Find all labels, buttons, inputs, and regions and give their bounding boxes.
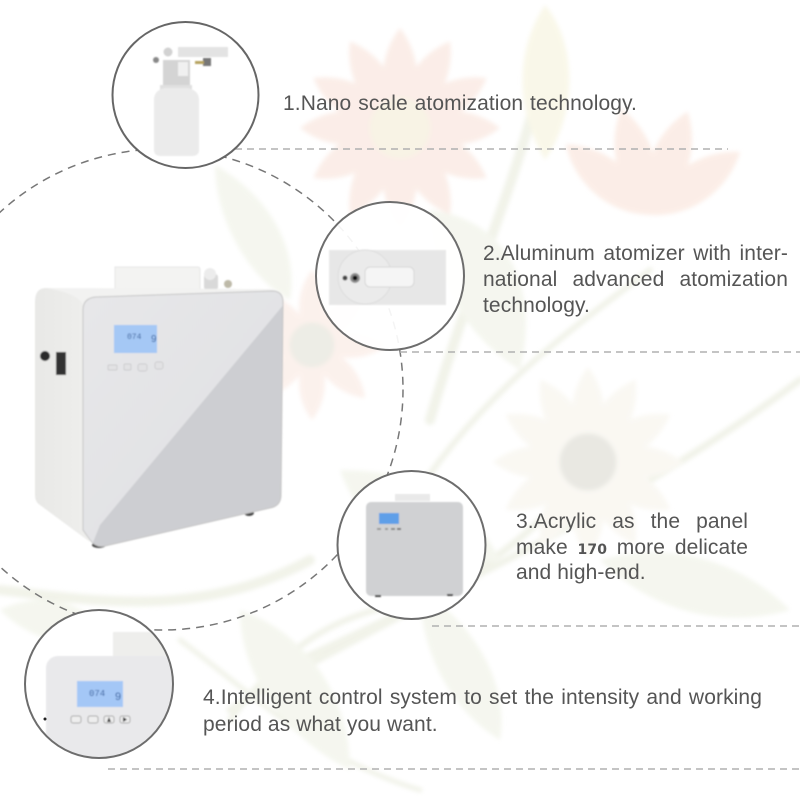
circle 4: control panel close-up	[25, 610, 176, 766]
text: feature 3	[516, 510, 748, 584]
device side panel	[35, 288, 105, 542]
text: feature 3: and high-end.	[516, 561, 646, 584]
text: feature 4	[203, 686, 762, 736]
top pink flower	[300, 28, 500, 228]
small device	[395, 494, 430, 501]
text: feature 3: make 170 more delicate	[516, 536, 748, 559]
device LCD	[114, 325, 157, 353]
main device	[35, 267, 290, 550]
device top block and knob	[115, 267, 232, 292]
device power socket and switch	[40, 351, 50, 361]
large dashed circle	[0, 149, 403, 630]
control panel LCD	[77, 681, 123, 707]
text: feature 2: technology.	[483, 294, 590, 317]
text: feature 2	[483, 242, 788, 317]
circle 4: control panel close-up: 9	[115, 691, 121, 703]
text: feature 4: period as what you want.	[203, 713, 438, 736]
text: feature 1: 1.Nano scale atomization technology.	[283, 92, 637, 115]
text: feature 2: 2.Aluminum atomizer with inter-	[483, 242, 788, 265]
text: feature 2: national advanced atomization	[483, 268, 788, 291]
main device: 9	[151, 334, 157, 345]
circle 3: device front view	[338, 471, 486, 619]
lower right daisy	[493, 367, 683, 557]
bottle	[153, 47, 228, 156]
centre flower	[237, 270, 387, 420]
text: feature 4: 4.Intelligent control system to set the intensity and working	[203, 686, 762, 709]
circle 2: aluminum atomizer top view	[316, 202, 464, 350]
main device: 074	[127, 333, 142, 342]
dashed separator lines	[108, 149, 800, 769]
circle 4: control panel close-up: 074	[89, 689, 105, 699]
circle 1: atomizer bottle	[112, 22, 258, 168]
atomizer plate	[329, 250, 446, 305]
device front panel	[80, 285, 290, 550]
control panel buttons	[71, 716, 130, 723]
device feet	[92, 542, 106, 548]
device buttons	[108, 362, 163, 371]
right tulip flower	[554, 104, 751, 231]
text: feature 3: 3.Acrylic as the panel	[516, 510, 748, 533]
